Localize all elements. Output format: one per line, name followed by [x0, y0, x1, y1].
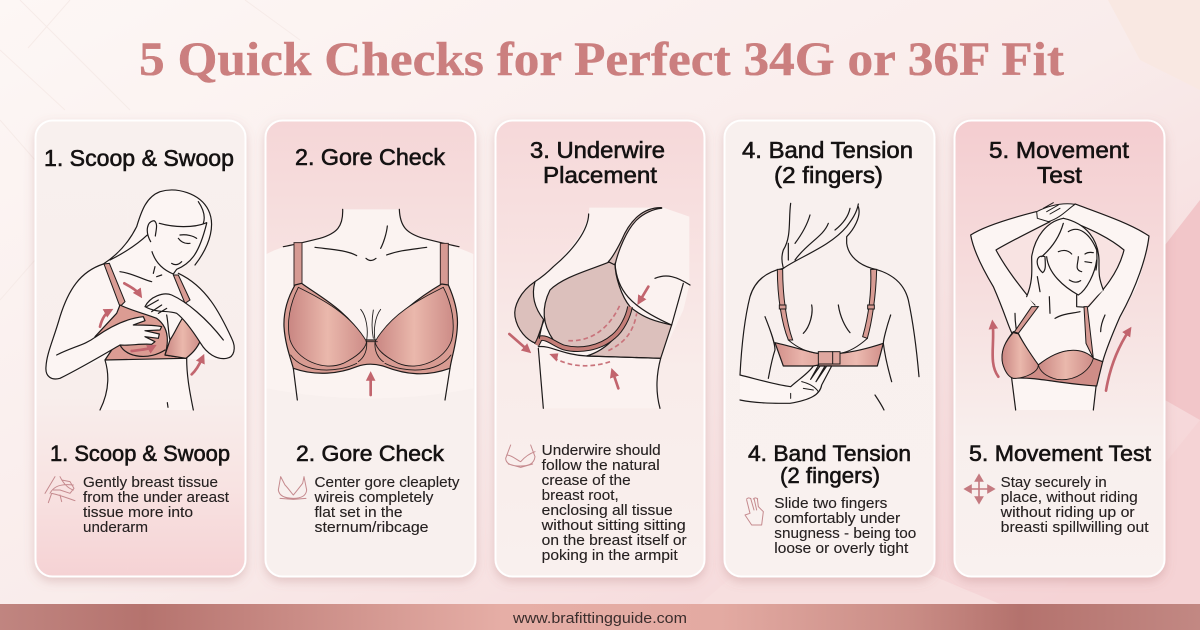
- text block: movement test: Stay securely in: [1001, 475, 1107, 491]
- text block: scoop and swoop: underarm: [83, 520, 148, 536]
- text block: scoop and swoop: from the under areast: [83, 490, 229, 506]
- text block: underwire: Underwire should: [542, 443, 661, 459]
- heading: gore check top: 2. Gore Check: [295, 144, 445, 170]
- text block: movement test: place, without riding: [1001, 490, 1138, 506]
- heading: band tension bottom: 4. Band Tension: [748, 441, 911, 466]
- panel: band tension: [724, 120, 934, 576]
- heading: scoop and swoop top: 1. Scoop & Swoop: [44, 145, 234, 171]
- illustration: woman scooping: [46, 190, 234, 410]
- heading: movement test bottom: 5. Movement Test: [969, 441, 1152, 466]
- footer bar: [0, 604, 1200, 630]
- text block: gore check: wireis completely: [313, 490, 434, 506]
- text block: underwire: on the breast itself or: [542, 533, 687, 549]
- panel: scoop and swoop: [36, 120, 246, 576]
- icon: bra outline: [278, 477, 307, 499]
- icon: scooping hands: [45, 477, 75, 503]
- heading: band tension top: (2 fingers): [774, 162, 883, 188]
- text block: movement test: without riding up or: [1000, 505, 1135, 521]
- heading: underwire placement top: 3. Underwire: [530, 137, 665, 163]
- footer url: www.brafittingguide.com: [512, 611, 687, 627]
- icon: underwire bra: [506, 445, 535, 467]
- text block: gore check: [313, 475, 460, 536]
- text block: movement test: [1000, 475, 1149, 536]
- text block: underwire: poking in the armpit: [542, 548, 678, 564]
- text block: band tension: [774, 496, 916, 557]
- text block: scoop and swoop: [83, 475, 229, 536]
- text block: band tension: comfortably under: [774, 511, 900, 527]
- text block: band tension: Slide two fingers: [774, 496, 887, 512]
- panel: movement test: [954, 120, 1164, 576]
- heading: movement test top: Test: [1037, 162, 1082, 188]
- text block: gore check: flat set in the: [314, 505, 402, 521]
- title: 5 Quick Checks for Perfect 34G or 36F Fit: [139, 33, 1064, 86]
- text block: underwire: breast root,: [542, 488, 619, 504]
- heading: underwire placement top: Placement: [543, 162, 657, 188]
- heading: movement test top: 5. Movement: [989, 137, 1129, 163]
- text block: underwire: enclosing all tissue: [542, 503, 673, 519]
- heading: band tension top: 4. Band Tension: [742, 137, 913, 163]
- illustration: side view underwire: [509, 208, 690, 408]
- heading: gore check bottom: 2. Gore Check: [296, 441, 445, 466]
- icon: four way arrows: [965, 475, 994, 503]
- text block: underwire: [541, 443, 687, 564]
- illustration: front bra gore: [267, 209, 473, 400]
- text block: scoop and swoop: tissue more into: [83, 505, 193, 521]
- text block: underwire: crease of the: [542, 473, 631, 489]
- text block: band tension: snugness - being too: [774, 526, 916, 542]
- text block: gore check: sternum/ribcage: [314, 520, 428, 536]
- panel: underwire placement: [496, 120, 704, 576]
- text block: band tension: loose or overly tight: [774, 541, 908, 557]
- illustration: arms raised movement: [971, 203, 1149, 410]
- text block: movement test: breasti spillwilling out: [1001, 520, 1149, 536]
- text block: gore check: Center gore cleaplety: [314, 475, 460, 491]
- text block: scoop and swoop: Gently breast tissue: [83, 475, 218, 491]
- icon: two fingers hand: [745, 498, 763, 525]
- heading: band tension bottom: (2 fingers): [780, 463, 880, 488]
- text block: underwire: without sitting sitting: [541, 518, 686, 534]
- panel: gore check: [266, 120, 476, 576]
- heading: scoop and swoop bottom: 1. Scoop & Swoop: [50, 441, 230, 466]
- text block: underwire: follow the natural: [542, 458, 660, 474]
- illustration: back view band check: [740, 203, 919, 410]
